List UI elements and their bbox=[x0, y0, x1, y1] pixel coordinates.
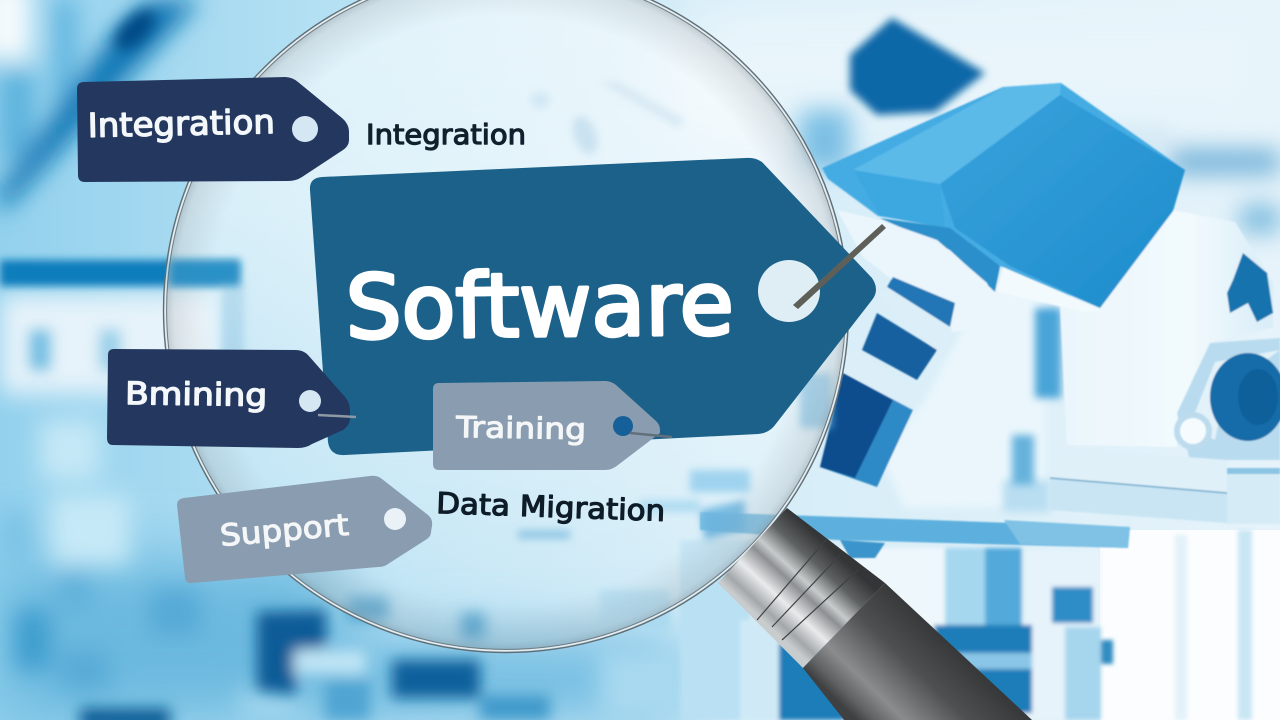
tag text: Integration bbox=[87, 102, 275, 145]
tag hole bbox=[384, 508, 406, 530]
tag hole bbox=[292, 116, 318, 142]
dark grip bbox=[803, 583, 1032, 720]
label: Integration: Integration bbox=[366, 118, 526, 151]
magnifying glass handle bbox=[718, 508, 1032, 720]
microscope stage bar bbox=[700, 512, 1130, 558]
title text: Software bbox=[345, 252, 734, 359]
tag string bbox=[630, 433, 672, 437]
blue mark on arm bbox=[1227, 253, 1273, 322]
tag text: Support bbox=[219, 508, 350, 554]
tag hole bbox=[613, 416, 633, 436]
tag: garbled Training (dark) bbox=[107, 349, 356, 448]
stage block bbox=[1050, 447, 1280, 524]
shelf band seen through lens bbox=[170, 260, 240, 286]
side knob bbox=[1177, 253, 1280, 460]
faint detail inside lens bbox=[518, 82, 832, 630]
objective housing bbox=[837, 210, 993, 332]
microscope arm bbox=[1060, 210, 1273, 447]
objective lenses bbox=[820, 277, 955, 487]
microscope head bbox=[822, 83, 1185, 308]
tag: Training (grey) bbox=[433, 381, 672, 470]
label: Data Migration: Data Migration bbox=[436, 486, 666, 528]
tag hole bbox=[758, 260, 820, 322]
tag: Software bbox=[310, 158, 886, 455]
microscope bbox=[700, 83, 1280, 558]
white wall, lower right bbox=[1100, 530, 1280, 720]
glare body behind objective bbox=[880, 280, 1045, 508]
tag hole bbox=[299, 390, 321, 412]
magnifying glass lens bbox=[164, 0, 848, 652]
metal collar bbox=[718, 508, 885, 668]
equipment base, lower right bbox=[680, 540, 1113, 720]
tag: Support (grey) bbox=[177, 476, 432, 583]
tag text: Bmining bbox=[125, 376, 267, 414]
tag: Integration (dark) bbox=[77, 77, 349, 182]
tag text: Training bbox=[455, 410, 586, 446]
tag string bbox=[793, 224, 886, 309]
tag string bbox=[318, 415, 356, 417]
